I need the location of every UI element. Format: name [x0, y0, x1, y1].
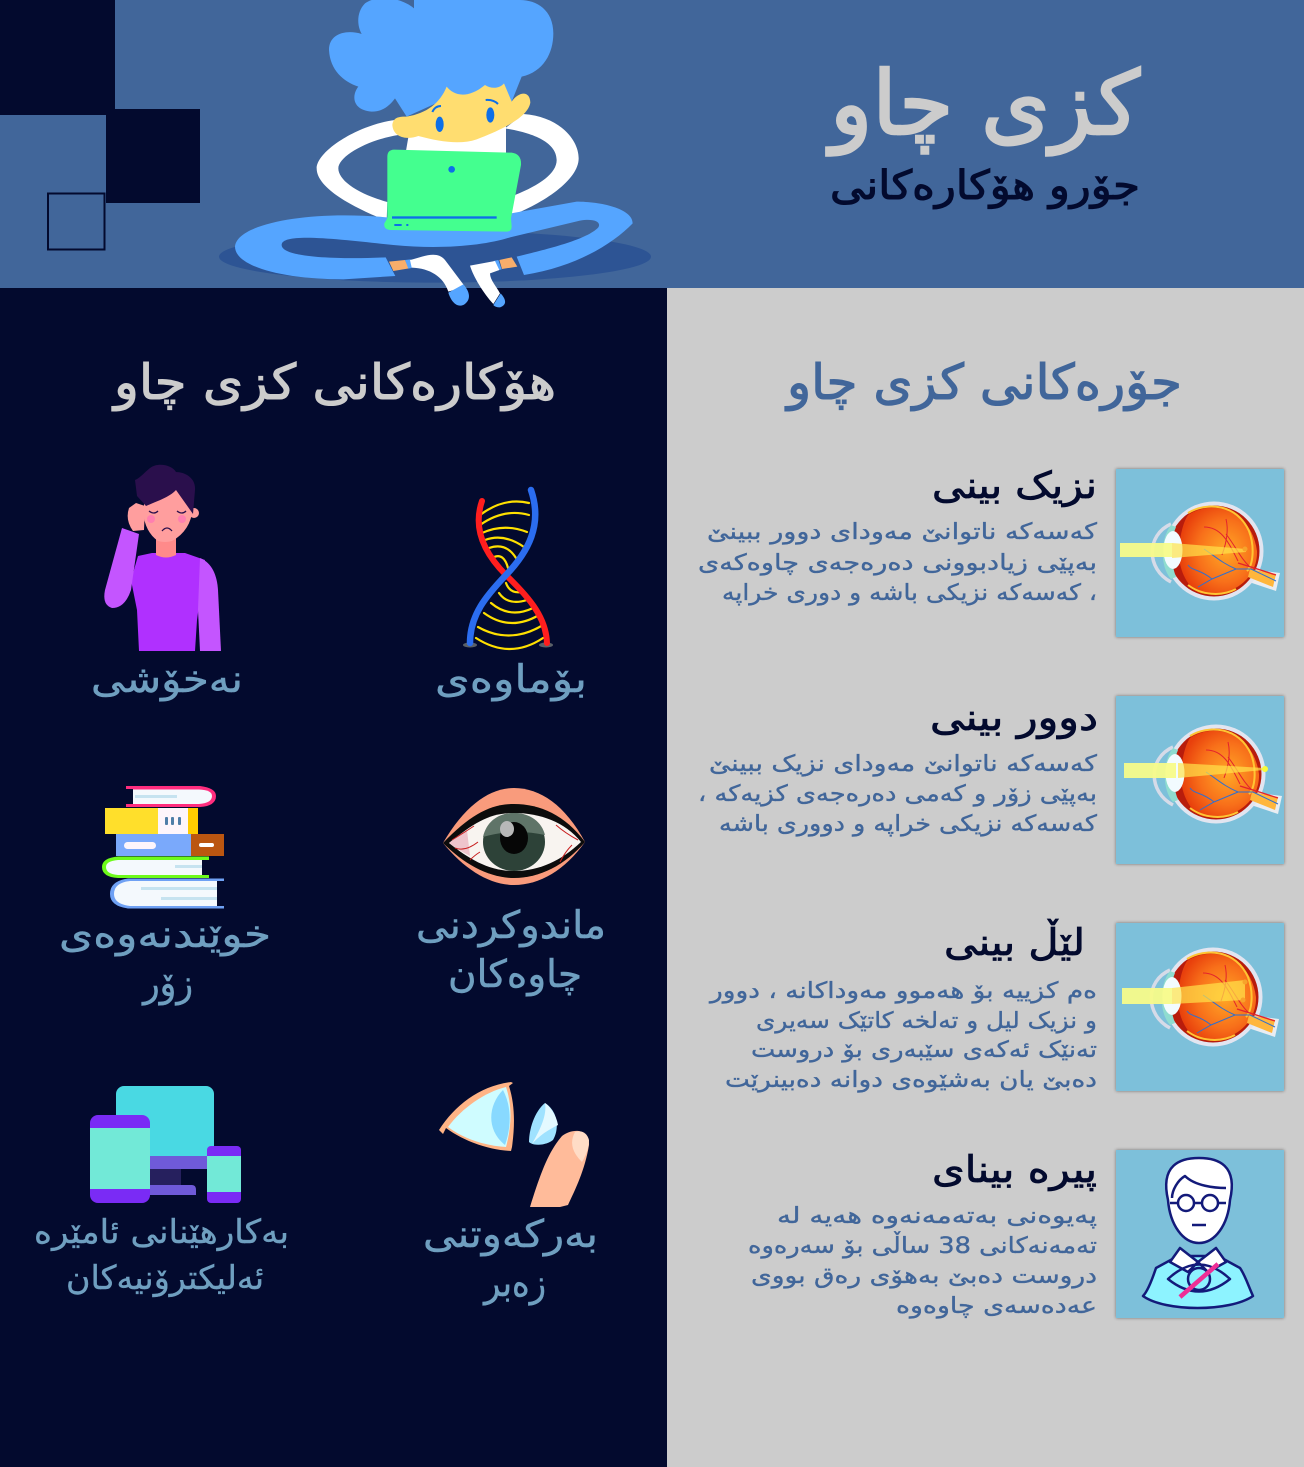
icon: electronic devices: [90, 1086, 241, 1203]
hair: [135, 465, 195, 514]
neck and torso: [405, 123, 506, 157]
label: excessive reading: زۆر: [141, 961, 193, 1006]
label: device use: ئەلیکترۆنیەکان: [66, 1258, 264, 1297]
iris: [483, 813, 545, 871]
yellow book: [105, 808, 158, 834]
icon: contact lens and finger: [439, 1082, 589, 1207]
decorative square middle: [106, 109, 200, 203]
decorative square top-left: [0, 0, 115, 115]
right arm: [505, 114, 579, 216]
label: excessive reading: خوێندنەوەی: [59, 912, 271, 957]
heading: types: جۆرەکانی کزی چاو: [784, 354, 1182, 411]
description: ەم کزییە بۆ هەموو مەوداکانە ، دوور: [709, 978, 1097, 1004]
pupil: [500, 822, 528, 854]
label: excessive reading: [59, 912, 271, 1006]
hair: [329, 0, 553, 117]
stand: [145, 1169, 181, 1185]
blue strand: [470, 490, 535, 643]
label: eye strain: چاوەکان: [448, 952, 582, 997]
header band: [0, 0, 1304, 288]
heading: causes: هۆکارەکانی کزی چاو: [111, 354, 556, 411]
description: و نزیک لیل و تەلخە کاتێک سەیری: [756, 1008, 1097, 1034]
cheeks: [147, 515, 186, 523]
iris: [491, 1090, 510, 1145]
description: [748, 1203, 1097, 1319]
eyelid skin: [443, 788, 585, 885]
label: heredity: بۆماوەی: [435, 657, 587, 702]
blue book: [116, 834, 191, 856]
description: دروست دەبێ بەهۆی رەق بووی: [751, 1263, 1097, 1289]
lash line: [443, 804, 585, 878]
heading: پیرە بینای: [932, 1148, 1097, 1191]
icon: tired red eye: [443, 788, 585, 885]
type: presbyopia: [748, 1148, 1284, 1319]
glasses: [1178, 1195, 1194, 1211]
lens: [529, 1103, 557, 1145]
heading: دوور بینی: [930, 696, 1098, 739]
legs: [235, 202, 633, 279]
green book: [102, 856, 209, 878]
left foot: [389, 260, 409, 271]
laptop details: [392, 166, 497, 226]
label: injury: [423, 1212, 598, 1306]
red strand: [479, 501, 547, 643]
description: پەیوەنی بەتەمەنەوە هەیە لە: [777, 1203, 1097, 1229]
description: دەبێ یان بەشێوەی دوانە دەبینرێت: [725, 1067, 1097, 1093]
blood vessels: [452, 825, 578, 862]
collar: [1170, 1248, 1226, 1272]
description: بەپێی زۆر و کەمی دەرەجەی کزیەکە ،: [698, 781, 1097, 807]
type: astigmatism: [709, 919, 1284, 1093]
heading: نزیک بینی: [932, 464, 1097, 507]
description: کەسەکە ناتوانێ مەودای دوور ببینێ: [707, 519, 1097, 545]
label: eye strain: ماندوکردنی: [416, 903, 606, 948]
description: [709, 978, 1097, 1093]
eyebrows: [432, 100, 498, 112]
sclera: [449, 813, 581, 871]
description: عەدەسەی چاوەوە: [896, 1293, 1097, 1319]
label: eye strain: [416, 903, 606, 997]
monitor: [116, 1086, 214, 1158]
floor shadow: [219, 231, 651, 283]
description: کەسەکە نزیکی خراپە و دووری باشە: [719, 811, 1097, 837]
background: right panel: [667, 288, 1304, 1467]
icon: stack of books: [102, 786, 224, 908]
raised arm: [104, 528, 139, 608]
crossed eye: [1168, 1264, 1230, 1292]
ear: [189, 508, 199, 518]
picture: [1116, 469, 1284, 637]
head and hair: [1166, 1158, 1232, 1243]
description: بەپێی زیادبوونی دەرەجەی چاوەکەی: [698, 550, 1097, 576]
description: تەنێک ئەکەی سێبەری بۆ دروست: [751, 1037, 1097, 1063]
description: [698, 751, 1097, 837]
fingernail: [572, 1131, 589, 1162]
finger: [530, 1131, 589, 1207]
eyes: [436, 107, 494, 132]
subtitle: جۆرو هۆکارەکانی: [830, 163, 1140, 209]
phone: [207, 1146, 241, 1203]
eye white: [448, 1087, 510, 1147]
eyes and mouth: [149, 511, 186, 531]
description: تەمەنەکانی 38 ساڵی بۆ سەرەوە: [748, 1231, 1097, 1259]
pink book: [126, 786, 216, 807]
type: hyperopia: [698, 696, 1284, 864]
right arm: [198, 558, 221, 651]
heading: لێڵ بینی: [944, 919, 1085, 964]
decorative outline square: [48, 194, 104, 250]
trunk: [131, 553, 205, 651]
inner corner: [449, 830, 470, 856]
title: کزی چاو: [826, 52, 1140, 156]
label: injury: زەبر: [482, 1261, 546, 1306]
description: ، کەسەکە نزیکی باشە و دوری خراپە: [722, 580, 1097, 606]
picture: [1116, 696, 1284, 864]
neck: [156, 538, 176, 558]
picture: [1116, 923, 1284, 1091]
eye outline: [439, 1082, 514, 1151]
label: injury: بەرکەوتنی: [423, 1212, 598, 1257]
description: کەسەکە ناتوانێ مەودای نزیک ببینێ: [709, 751, 1097, 777]
laptop: [384, 150, 521, 232]
torso: [1143, 1256, 1253, 1308]
left arm: [317, 120, 398, 221]
illustration: person with laptop: [219, 0, 651, 307]
description: [698, 519, 1097, 606]
rungs: [476, 502, 543, 649]
base shadows: [463, 642, 553, 648]
highlight: [500, 821, 514, 837]
face: [392, 83, 530, 142]
label: illness: نەخۆشی: [91, 657, 243, 702]
right foot: [499, 257, 517, 269]
type: myopia: [698, 464, 1284, 637]
hand: [128, 503, 145, 531]
bottom book: [110, 878, 224, 908]
icon: sick person: [104, 465, 221, 651]
picture: [1116, 1150, 1284, 1318]
background: left panel: [0, 288, 667, 1467]
label: device use: [34, 1212, 289, 1297]
phablet: [90, 1115, 150, 1203]
label: device use: بەکارهێنانی ئامێرە: [34, 1212, 289, 1251]
head: [143, 488, 193, 542]
icon: DNA: [463, 490, 553, 649]
